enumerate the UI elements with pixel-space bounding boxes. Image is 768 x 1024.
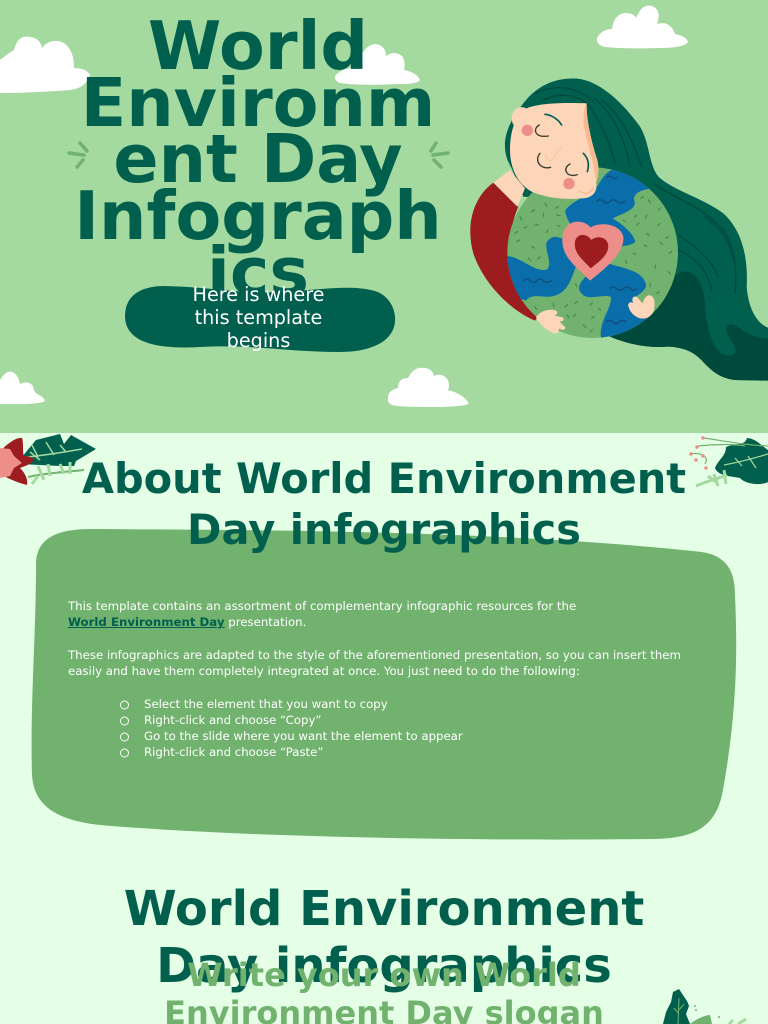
slogan heading: Write your own World bbox=[187, 956, 581, 994]
inner heart bbox=[575, 235, 608, 268]
slogan heading bbox=[164, 956, 604, 1024]
earth bbox=[507, 167, 678, 338]
earth wave marks bbox=[523, 176, 637, 324]
cloud middle bbox=[335, 44, 420, 85]
title: Environm bbox=[81, 64, 435, 142]
hand right bbox=[628, 295, 655, 319]
title bbox=[74, 7, 442, 311]
cloud bottom left bbox=[0, 372, 45, 404]
eyes and brows bbox=[535, 125, 577, 175]
title sprout left bbox=[69, 143, 87, 167]
foliage bottom right bbox=[663, 989, 746, 1024]
ear bbox=[512, 107, 528, 126]
bullet markers bbox=[120, 701, 128, 757]
about body text: These infographics are adapted to the style of the aforementioned presentation, so you can insert them bbox=[68, 648, 681, 662]
instructions list: Go to the slide where you want the element to appear bbox=[144, 729, 463, 743]
title: Infograph bbox=[74, 176, 442, 254]
about panel bbox=[32, 529, 736, 840]
nose bbox=[545, 146, 562, 161]
subtitle bbox=[193, 283, 324, 352]
title: World bbox=[148, 7, 368, 85]
subtitle: begins bbox=[227, 329, 290, 352]
lower ear shading bbox=[579, 188, 593, 193]
hair bbox=[505, 79, 768, 381]
face edge shadow bbox=[583, 103, 598, 181]
heart bbox=[562, 222, 623, 281]
face bbox=[510, 103, 598, 199]
cloud top right bbox=[597, 6, 688, 48]
cloud top left bbox=[0, 37, 90, 93]
instructions list: Select the element that you want to copy bbox=[144, 697, 388, 711]
about body text: World Environment Day presentation. bbox=[68, 615, 306, 629]
title: ics bbox=[207, 233, 309, 311]
foliage top right bbox=[689, 436, 768, 486]
about body text bbox=[68, 599, 681, 678]
subtitle: Here is where bbox=[193, 283, 324, 306]
earth oceans bbox=[508, 170, 649, 338]
section heading: World Environment bbox=[124, 881, 644, 937]
about body text: This template contains an assortment of complementary infographic resources for the bbox=[68, 599, 576, 613]
instructions list bbox=[144, 697, 463, 759]
title sprout right bbox=[431, 143, 448, 167]
pill behind subtitle bbox=[125, 286, 395, 352]
about heading: Day infographics bbox=[187, 504, 581, 554]
instructions list: Right-click and choose “Copy” bbox=[144, 713, 321, 727]
cloud bottom center bbox=[388, 368, 469, 407]
hair dark shade bbox=[607, 271, 768, 381]
title: ent Day bbox=[113, 120, 403, 198]
cheeks bbox=[522, 125, 533, 136]
about heading bbox=[82, 454, 686, 554]
foliage top left bbox=[0, 434, 96, 485]
illustration: girl hugging the earth bbox=[470, 79, 768, 381]
about body text: easily and have them completely integrated at once. You just need to do the following: bbox=[68, 664, 580, 678]
neck bbox=[493, 170, 525, 207]
red sweater bbox=[470, 183, 538, 321]
top banner background bbox=[0, 0, 768, 433]
section heading: Day infographics bbox=[156, 938, 612, 994]
lower section background bbox=[0, 433, 768, 1024]
section heading bbox=[124, 881, 644, 994]
hair strands bbox=[535, 88, 736, 293]
instructions list: Right-click and choose “Paste” bbox=[144, 745, 323, 759]
about heading: About World Environment bbox=[82, 454, 686, 503]
hand left bbox=[536, 310, 565, 334]
subtitle: this template bbox=[195, 306, 322, 329]
earth land speckles bbox=[515, 197, 672, 332]
